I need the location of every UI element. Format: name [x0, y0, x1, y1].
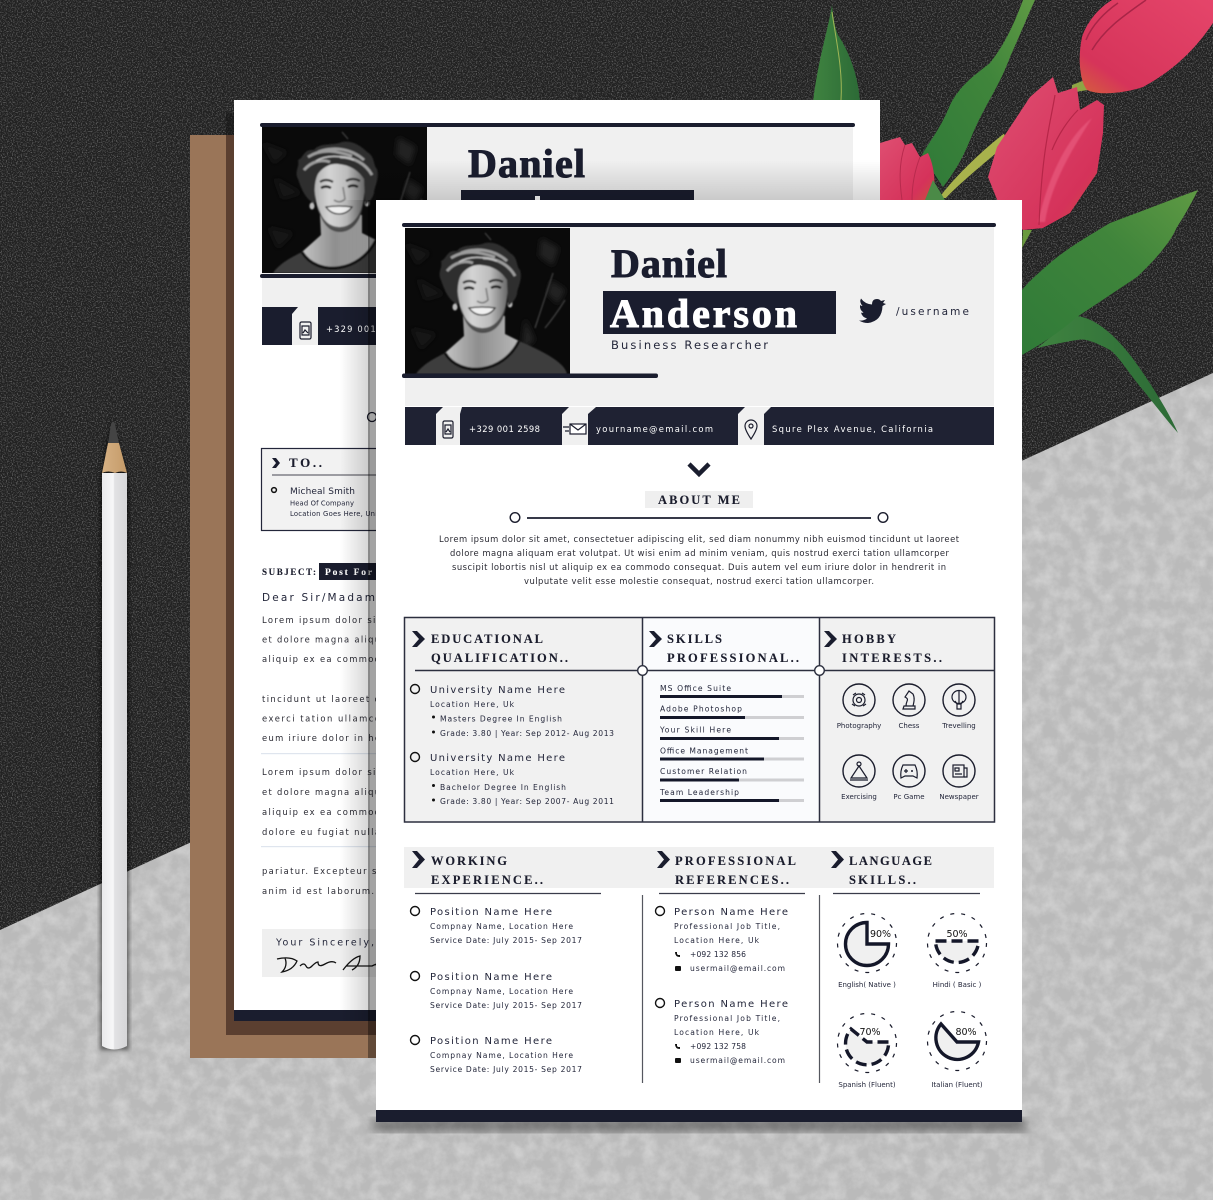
middle tulip	[988, 77, 1104, 248]
back page name box	[461, 190, 694, 204]
back page: letter text	[261, 615, 381, 896]
skill bar: Office Management	[660, 746, 804, 760]
curved leaf	[1037, 316, 1178, 433]
back page: subject	[262, 563, 389, 580]
education heading: QUALIFICATION..	[431, 651, 568, 665]
job 3: Compnay Name, Location Here	[430, 1051, 573, 1060]
language heading: LANGUAGE	[849, 854, 932, 868]
chart: Spanish 70%	[838, 1014, 896, 1089]
back page: letter text: eum iriure dolor in he	[262, 733, 380, 743]
job 1: Compnay Name, Location Here	[430, 922, 573, 931]
hobby: chess: Chess	[899, 722, 920, 730]
education heading: EDUCATIONAL	[431, 632, 543, 646]
reference 2: Professional Job Title,	[674, 1014, 780, 1023]
panel: professional references	[656, 851, 805, 1065]
panel: front resume page	[376, 200, 1022, 1122]
references heading: PROFESSIONAL	[675, 854, 796, 868]
job 3	[410, 1036, 582, 1074]
back page: letter text: et dolore magna aliqu	[262, 787, 380, 797]
back page photo	[262, 127, 427, 273]
about me heading	[645, 491, 753, 508]
hobby: newspaper: Newspaper	[939, 793, 979, 801]
back page: letter text: et dolore magna aliqu	[262, 634, 380, 644]
hobby: pc game: Pc Game	[893, 793, 925, 801]
heading band	[404, 847, 994, 888]
skill bar: Adobe Photoshop	[660, 704, 804, 719]
back page: signature block	[262, 929, 382, 977]
back page header grey	[262, 127, 853, 277]
front page side shadow	[340, 200, 370, 1021]
chart: Hindi 50%: Hindi ( Basic )	[933, 981, 982, 989]
job 3: Service Date: July 2015- Sep 2017	[430, 1065, 582, 1074]
back page: letter text: anim id est laborum.	[262, 886, 374, 896]
about me text: dolore magna aliquam erat volutpat. Ut wisi enim ad minim veniam, quis nostrud exerci tation ullamcorper	[450, 548, 950, 558]
skills section	[649, 631, 804, 802]
reference 1	[656, 906, 788, 973]
job 2: Service Date: July 2015- Sep 2017	[430, 1001, 582, 1010]
back page: letter text: Lorem ipsum dolor sit	[262, 615, 381, 625]
chart: Hindi 50%: 50%	[946, 929, 968, 940]
language heading: SKILLS..	[849, 873, 916, 887]
pencil lead	[108, 422, 119, 443]
leaf: long upper	[922, 0, 1035, 187]
experience heading: EXPERIENCE..	[431, 873, 543, 887]
back page grey strip	[262, 277, 382, 308]
back page: greeting: Dear Sir/Madam	[262, 592, 375, 604]
twitter username: /username	[896, 306, 969, 318]
job 2: Position Name Here	[430, 972, 552, 983]
back page first name: Daniel	[468, 141, 585, 186]
back page: letter text: dolore eu fugiat nulla	[262, 827, 380, 837]
address	[738, 407, 933, 445]
back page contact strip: +329 001 2	[326, 324, 386, 334]
skill bar: Team Leadership: Team Leadership	[659, 788, 739, 797]
back page: letter text: aliquip ex ea commod	[262, 807, 380, 817]
hobby: pc game	[893, 755, 925, 801]
last name box: Anderson	[610, 291, 797, 336]
reference 1: Location Here, Uk	[674, 936, 760, 945]
chart: Spanish 70%: 70%	[859, 1027, 881, 1038]
about me text: vulputate velit esse molestie consequat, nostrud exerci tation ullamcorper.	[524, 576, 874, 586]
chart: English 90%	[838, 914, 896, 989]
top bar	[402, 223, 996, 227]
back page circle	[368, 412, 376, 422]
hobby: photography	[837, 684, 881, 730]
education heading	[412, 631, 568, 665]
reference 2	[656, 998, 788, 1065]
envelope shadow	[226, 135, 390, 1035]
skill bar: Customer Relation	[660, 767, 804, 782]
skills heading: SKILLS	[667, 632, 722, 646]
chart: Italian 80%	[928, 1012, 986, 1089]
back page: subject: Post For	[325, 568, 373, 578]
education entry 2	[410, 752, 614, 806]
education section	[410, 631, 614, 806]
kraft envelope	[190, 135, 390, 1058]
education entry 2: University Name Here	[430, 753, 565, 764]
skill bar: MS Office Suite	[660, 684, 804, 698]
chart: English 90%: English( Native )	[838, 981, 896, 989]
large leaf	[1022, 190, 1198, 355]
contact strip	[405, 407, 994, 445]
back page bottom bar	[234, 1010, 394, 1021]
about me text: Lorem ipsum dolor sit amet, consectetuer adipiscing elit, sed diam nonummy nibh euismod tincidunt ut laoreet	[439, 534, 960, 544]
back page shadow on background	[226, 113, 236, 135]
skill bar: Your Skill Here: Your Skill Here	[659, 726, 731, 734]
reference 2: Location Here, Uk	[674, 1028, 760, 1037]
icon: twitter	[859, 298, 886, 323]
photo bar	[402, 374, 658, 378]
back page photo bar	[260, 274, 390, 278]
pencil wood	[102, 443, 127, 473]
reference 1: +092 132 856	[690, 950, 746, 959]
skill bar: Office Management: Office Management	[660, 746, 748, 756]
back page: letter text: exerci tation ullamco	[262, 714, 380, 724]
education entry 2: Grade: 3.80 | Year: Sep 2007- Aug 2011	[440, 797, 614, 806]
education entry 1: Masters Degree In English	[440, 714, 562, 724]
panel: education, skills, hobby table	[404, 618, 994, 822]
back page: letter text: Lorem ipsum dolor sit	[262, 767, 381, 777]
about me text: suscipit lobortis nisl ut aliquip ex ea commodo consequat. Duis autem vel eum iriure dolor in hendrerit in	[452, 562, 946, 572]
back page top shadow	[376, 160, 880, 200]
skill bar: MS Office Suite: MS Office Suite	[660, 684, 731, 693]
education entry 1: University Name Here	[430, 685, 565, 696]
chart: Italian 80%: Italian (Fluent)	[931, 1081, 983, 1089]
chart: English 90%: 90%	[870, 929, 891, 940]
skills heading: PROFESSIONAL..	[667, 651, 799, 665]
references heading	[657, 851, 796, 887]
first name: Daniel	[611, 241, 727, 286]
reference 2: usermail@email.com	[690, 1056, 785, 1065]
education entry 1	[410, 684, 614, 738]
reference 2: Person Name Here	[674, 999, 788, 1010]
education entry 1: Location Here, Uk	[430, 700, 515, 709]
chart: Hindi 50%	[928, 914, 986, 989]
photo	[405, 228, 570, 374]
hobby: exercising	[841, 755, 877, 801]
reference 1: Person Name Here	[674, 907, 788, 918]
job 3: Position Name Here	[430, 1036, 552, 1047]
panel: back cover letter page	[234, 100, 880, 1021]
language heading	[831, 851, 932, 887]
about me divider	[510, 513, 888, 522]
pencil body	[102, 473, 127, 1050]
flowers: tulips and leaves	[813, 0, 1213, 433]
references heading: REFERENCES..	[675, 873, 789, 887]
back page top bar	[260, 123, 855, 127]
back page contact strip	[262, 307, 392, 345]
phone: +329 001 2598	[469, 424, 540, 434]
background: grey concrete	[0, 373, 1213, 1200]
icon: chevron down	[689, 464, 709, 474]
back page: To box	[262, 448, 392, 530]
hobby heading: INTERESTS..	[842, 651, 942, 665]
job 2: Compnay Name, Location Here	[430, 987, 573, 996]
header panel	[402, 223, 996, 406]
phone	[436, 407, 540, 445]
front page sheet	[376, 200, 1022, 1122]
hobby: travelling: Trevelling	[941, 722, 976, 730]
hobby heading: HOBBY	[842, 632, 896, 646]
back page: signature block: Your Sincerely,	[275, 938, 374, 948]
back page: letter text: tincidunt ut laoreet d	[262, 694, 380, 704]
panel: working experience	[410, 851, 601, 1074]
front page ground shadow	[372, 1118, 1026, 1132]
back page: To box: TO..	[289, 455, 322, 470]
back page: letter text: aliquip ex ea commod	[262, 654, 380, 664]
hobby: chess	[893, 684, 925, 730]
back page: To box: Location Goes Here, Unit	[290, 510, 380, 518]
address: Squre Plex Avenue, California	[772, 424, 933, 434]
back page: letter text: pariatur. Excepteur si	[262, 866, 380, 876]
job 1	[410, 906, 582, 945]
education entry 2: Location Here, Uk	[430, 768, 515, 777]
reference 1: usermail@email.com	[690, 964, 785, 973]
pencil	[100, 419, 129, 1050]
chart: Spanish 70%: Spanish (Fluent)	[838, 1081, 896, 1089]
experience heading: WORKING	[431, 854, 507, 868]
hobby: photography: Photography	[837, 722, 881, 730]
reference 1: Professional Job Title,	[674, 922, 780, 931]
experience heading	[412, 851, 543, 887]
about me text	[439, 534, 960, 586]
back page: subject: SUBJECT:	[262, 567, 316, 577]
skill bar: Team Leadership	[659, 788, 804, 802]
front page dark shadow band	[368, 200, 376, 1058]
skill bar: Your Skill Here	[659, 726, 804, 740]
panel: language skills	[831, 851, 986, 1089]
hobby heading	[824, 631, 942, 665]
back page: To box: Micheal Smith	[290, 487, 355, 497]
job 1: Service Date: July 2015- Sep 2017	[430, 936, 582, 945]
skill bar: Adobe Photoshop: Adobe Photoshop	[660, 704, 742, 714]
back page: To box: Head Of Company	[290, 500, 354, 508]
chart: Italian 80%: 80%	[955, 1027, 977, 1038]
reference 2: +092 132 758	[690, 1042, 746, 1051]
hobby section	[824, 631, 979, 801]
hobby: travelling	[941, 684, 976, 730]
education entry 2: Bachelor Degree In English	[440, 783, 566, 792]
hobby: newspaper	[939, 755, 979, 801]
education entry 1: Grade: 3.80 | Year: Sep 2012- Aug 2013	[440, 729, 614, 738]
front page bottom bar	[376, 1110, 1022, 1122]
top tulip	[1072, 0, 1213, 100]
hobby: exercising: Exercising	[841, 793, 877, 801]
tulip stem	[943, 137, 1005, 196]
back page sheet	[234, 100, 880, 1021]
small tulip	[880, 137, 945, 202]
leaf: small top	[813, 5, 860, 102]
skills heading	[649, 631, 799, 665]
column dividers	[642, 895, 820, 1083]
job 1: Position Name Here	[430, 907, 552, 918]
job 2	[410, 972, 582, 1010]
email: yourname@email.com	[596, 424, 713, 434]
email	[562, 407, 713, 445]
skill bar: Customer Relation: Customer Relation	[660, 767, 747, 776]
job title: Business Researcher	[611, 338, 768, 352]
about me heading: ABOUT ME	[658, 493, 740, 507]
